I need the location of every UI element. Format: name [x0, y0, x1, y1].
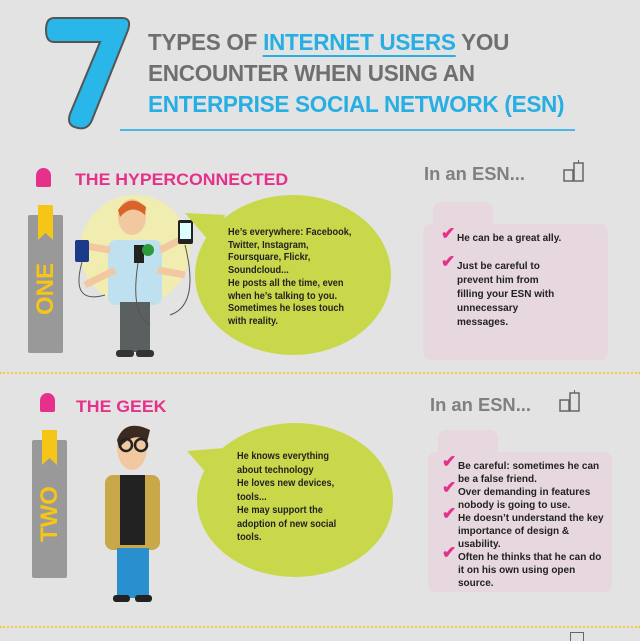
number label: TWO: TWO [36, 486, 63, 542]
panel: esn folder one: He can be a great ally. [457, 233, 561, 244]
panel: esn folder two: Be careful: sometimes he can [458, 461, 599, 472]
panel: esn folder one: filling your ESN with [457, 289, 554, 300]
panel: esn folder two: ✔ [442, 452, 456, 471]
panel: esn folder two: it on his own using open [458, 565, 575, 576]
speech bubble two: He may support the [237, 505, 323, 516]
big number 7 [45, 17, 130, 130]
speech bubble two: He knows everything [237, 451, 329, 462]
panel: esn folder two: Over demanding in features [458, 487, 590, 498]
heading: in an esn: In an ESN... [430, 395, 531, 415]
speech bubble two: about technology [237, 464, 314, 476]
speech bubble two: tools. [237, 532, 262, 543]
panel: esn folder two: usability. [458, 539, 501, 550]
panel: esn folder two: He doesn’t understand the key [458, 513, 604, 524]
speech bubble one: Twitter, Instagram, [228, 240, 309, 251]
panel: esn folder two: source. [458, 578, 494, 589]
speech bubble one: Foursquare, Flickr, [228, 252, 310, 263]
speech bubble two: adoption of new social [237, 518, 336, 530]
panel: esn folder two: ✔ [442, 543, 456, 562]
speech bubble one: Sometimes he loses touch [228, 303, 344, 314]
panel: esn folder two: ✔ [442, 504, 456, 523]
title [148, 29, 564, 117]
panel: esn folder one: messages. [457, 317, 508, 328]
panel: esn folder two: nobody is going to use. [458, 500, 570, 511]
speech bubble one: when he’s talking to you. [228, 291, 337, 302]
section two [32, 390, 612, 602]
number label: TWO [32, 430, 67, 578]
panel: esn folder one: ✔ [441, 252, 455, 271]
speech bubble one: Soundcloud... [228, 265, 289, 276]
speech bubble two: He loves new devices, [237, 478, 334, 489]
speech bubble two: tools... [237, 492, 267, 502]
number label: ONE: ONE [32, 263, 59, 315]
icon: building [559, 390, 580, 412]
panel: esn folder one: prevent him from [457, 275, 539, 286]
section one [28, 160, 608, 360]
number label: ONE [28, 205, 63, 353]
panel: esn folder one: unnecessary [457, 303, 518, 314]
title: TYPES OF INTERNET USERS YOU [148, 29, 509, 55]
illustration: geek [105, 426, 160, 602]
panel: esn folder two: be a false friend. [458, 474, 537, 485]
speech bubble one: He posts all the time, even [228, 278, 344, 289]
panel: esn folder two: ✔ [442, 478, 456, 497]
panel: esn folder one [423, 202, 608, 360]
icon: ghost [36, 168, 51, 187]
title: ENTERPRISE SOCIAL NETWORK (ESN) [148, 91, 564, 117]
illustration: hyperconnected man [75, 195, 193, 357]
icon: building [563, 160, 584, 182]
heading: the geek: THE GEEK [76, 397, 166, 416]
panel: esn folder two: Often he thinks that he can do [458, 552, 601, 563]
panel: esn folder two [428, 430, 612, 592]
panel: esn folder one: Just be careful to [457, 261, 540, 272]
icon: building bottom [570, 632, 584, 641]
speech bubble one: with reality. [228, 316, 278, 327]
speech bubble one [185, 195, 391, 355]
speech bubble one: He’s everywhere: Facebook, [228, 227, 351, 238]
icon: ghost [40, 393, 55, 412]
panel: esn folder two: importance of design & [458, 526, 569, 537]
panel: esn folder one: ✔ [441, 224, 455, 243]
title: ENCOUNTER WHEN USING AN [148, 60, 475, 86]
heading: in an esn: In an ESN... [424, 164, 525, 184]
speech bubble two [187, 423, 393, 577]
heading: the hyperconnected: THE HYPERCONNECTED [75, 170, 288, 189]
